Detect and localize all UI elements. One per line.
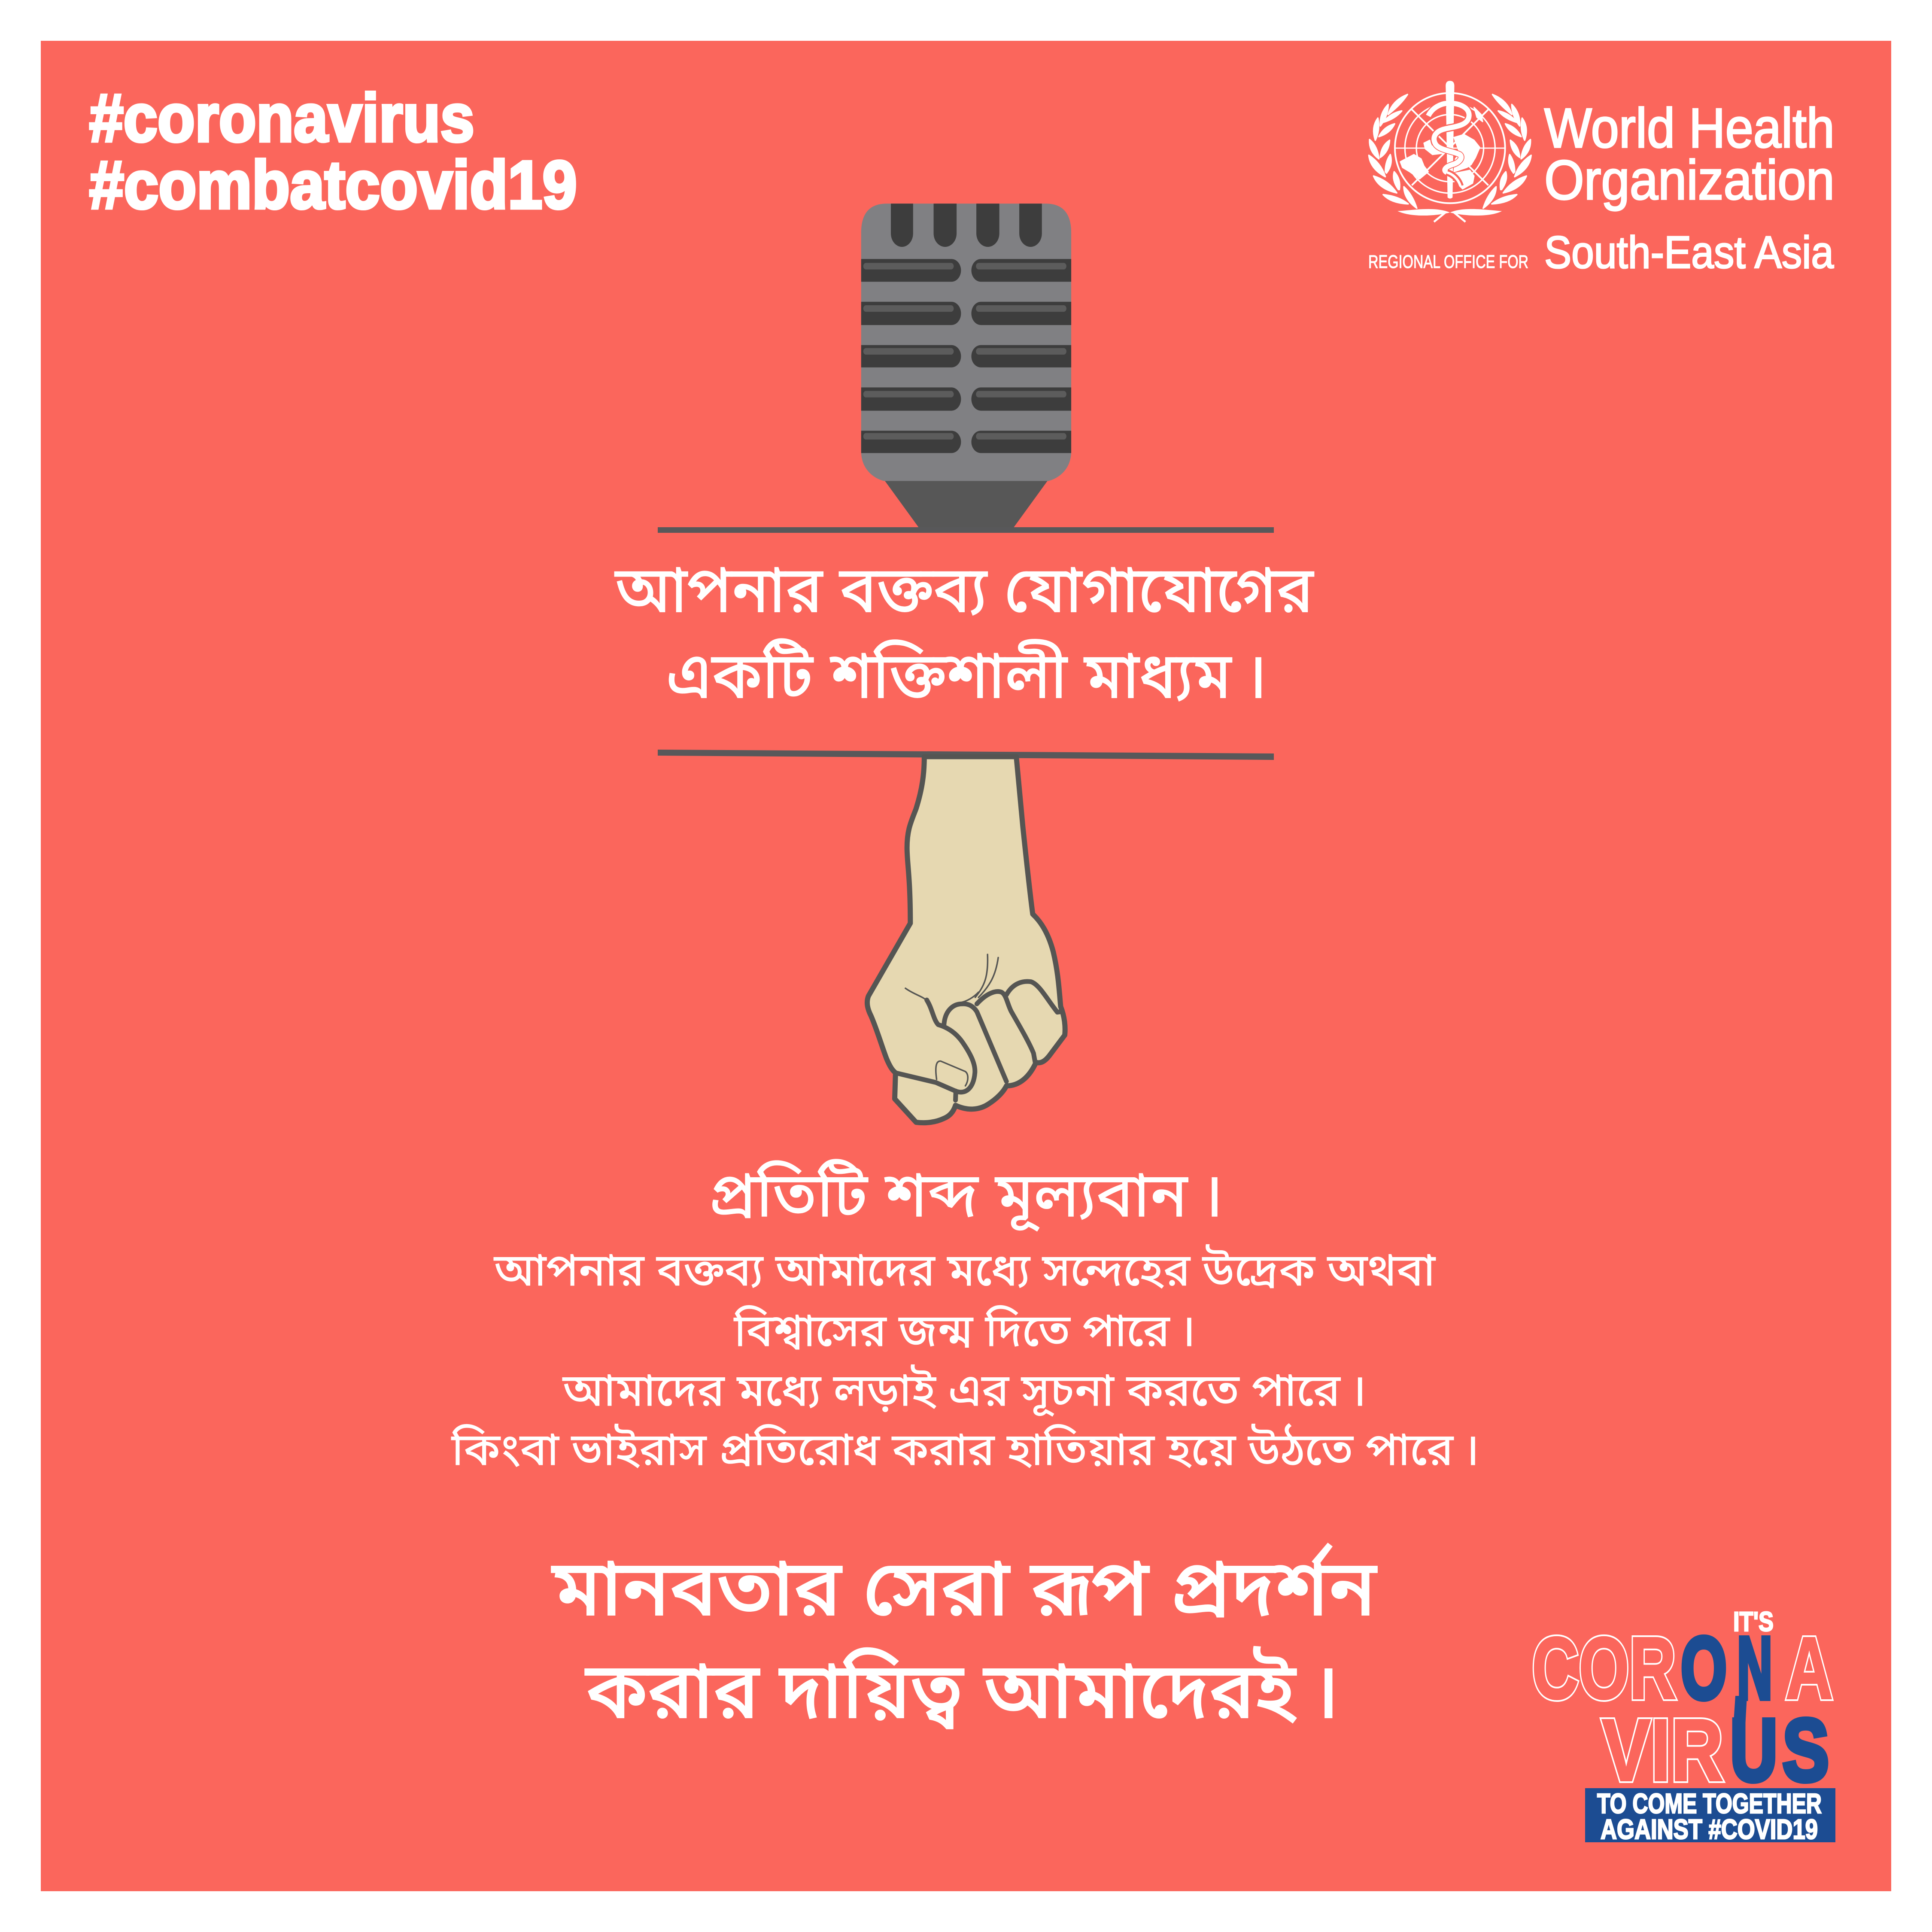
outlined letters: A [1786, 1619, 1833, 1717]
body text: কিংবা ভাইরাস প্রতিরোধ করার হাতিয়ার হয়ে উঠতে পারে । [451, 1424, 1479, 1475]
body text [451, 1245, 1479, 1475]
outlined letters [1532, 1619, 1833, 1799]
emblem staff and serpent [1428, 81, 1469, 198]
outlined letters: COR [1532, 1619, 1676, 1717]
blue letters: O [1681, 1619, 1727, 1717]
blue letters: S [1783, 1701, 1829, 1799]
emblem continents [1400, 107, 1482, 189]
icon: WHO emblem [1369, 81, 1531, 222]
body text: আপনার বক্তব্য আমাদের মধ্যে সন্দেহের উদ্রেক অথবা [493, 1245, 1436, 1295]
icon: raised fist [867, 756, 1065, 1123]
logo: It's Coronavirus campaign: AGAINST #COVID19 [1601, 1814, 1818, 1845]
logo: World Health Organization South-East Asia [1368, 81, 1835, 278]
mic grille bars [861, 259, 1071, 453]
outlined letters: COR [1532, 1619, 1676, 1717]
hashtags: #combatcovid19 [89, 147, 577, 223]
logo: It's Coronavirus campaign [1532, 1606, 1835, 1845]
fist thin creases [905, 954, 998, 1086]
mic neck [884, 479, 1048, 528]
blue banner [1585, 1788, 1835, 1842]
emblem ribbon [1397, 209, 1502, 222]
heading: top message: একটি শক্তিশালী মাধ্যম । [666, 639, 1267, 711]
icon: microphone [861, 204, 1071, 528]
fist finger lines [896, 981, 1061, 1100]
hashtags [89, 80, 577, 223]
outlined letters: A [1786, 1619, 1833, 1717]
subheading: প্রতিটি শব্দ মূল্যবান । [708, 1159, 1224, 1231]
closing message [552, 1543, 1377, 1734]
blue letters: U [1730, 1701, 1777, 1799]
emblem wreath [1369, 94, 1531, 208]
outlined letters: VIR [1602, 1701, 1723, 1799]
logo: It's Coronavirus campaign: IT'S [1733, 1606, 1774, 1637]
body text: আমাদের মধ্যে লড়াই এর সূচনা করতে পারে । [562, 1365, 1367, 1417]
logo wordmark: REGIONAL OFFICE FOR [1368, 252, 1528, 272]
closing message: মানবতার সেরা রূপ প্রদর্শন [552, 1543, 1377, 1631]
blue letters [1681, 1619, 1829, 1799]
mic bar highlights [863, 263, 1066, 440]
logo wordmark [1368, 97, 1835, 278]
body text: বিশ্বাসের জন্ম দিতে পারে । [733, 1306, 1196, 1356]
outlined letters: VIR [1602, 1701, 1723, 1799]
mic body [861, 204, 1071, 481]
logo wordmark: World Health [1544, 97, 1835, 159]
emblem globe [1395, 93, 1505, 203]
logo wordmark: Organization [1544, 149, 1835, 211]
fist outline [867, 756, 1065, 1123]
mic top slots [891, 204, 1042, 247]
blue letters: N [1737, 1619, 1772, 1717]
closing message: করার দায়িত্ব আমাদেরই । [585, 1647, 1340, 1734]
heading: top message [614, 553, 1314, 711]
hashtags: #coronavirus [89, 80, 474, 156]
logo: It's Coronavirus campaign: TO COME TOGETHER [1597, 1788, 1822, 1819]
heading: top message: আপনার বক্তব্য যোগাযোগের [614, 553, 1314, 626]
logo wordmark: South-East Asia [1544, 227, 1834, 278]
